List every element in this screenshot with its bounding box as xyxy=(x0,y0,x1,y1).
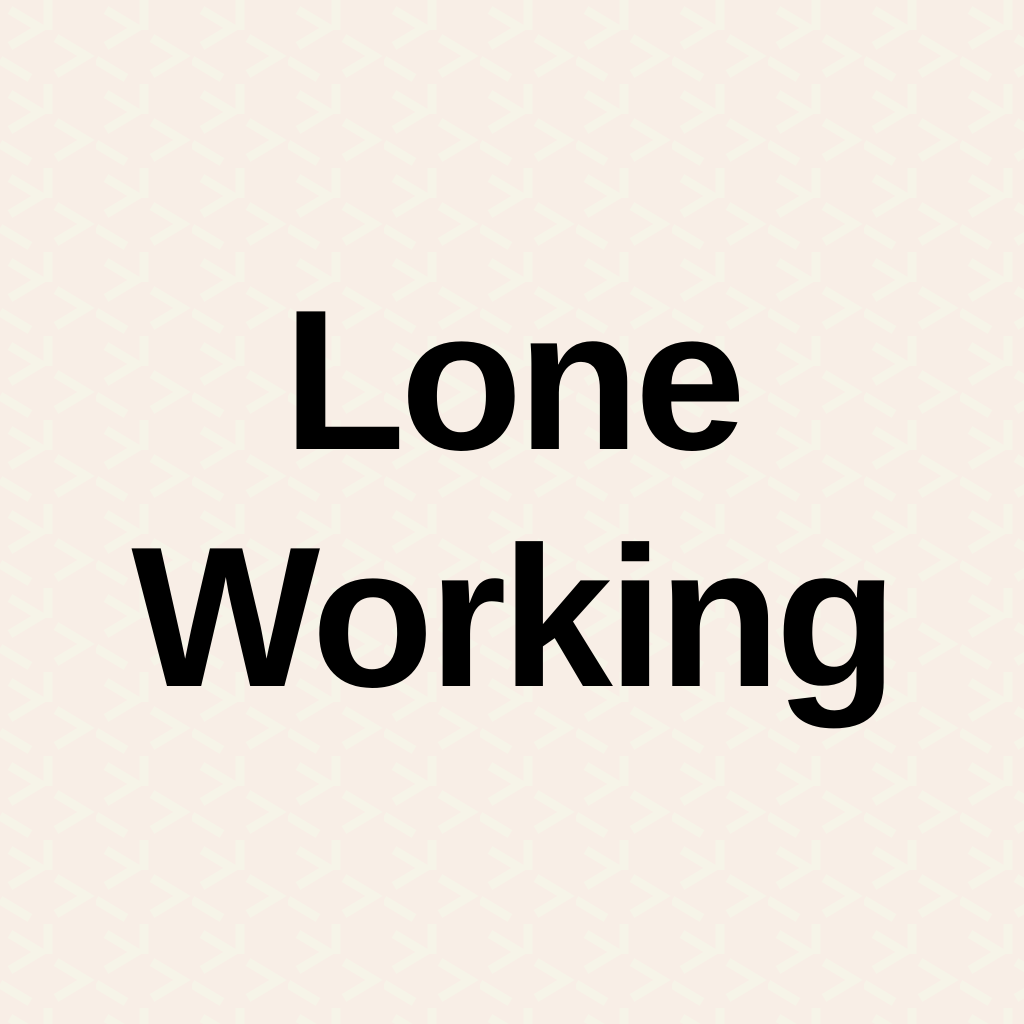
title line 2: Working xyxy=(131,506,893,729)
title line 1: Lone xyxy=(283,269,741,492)
